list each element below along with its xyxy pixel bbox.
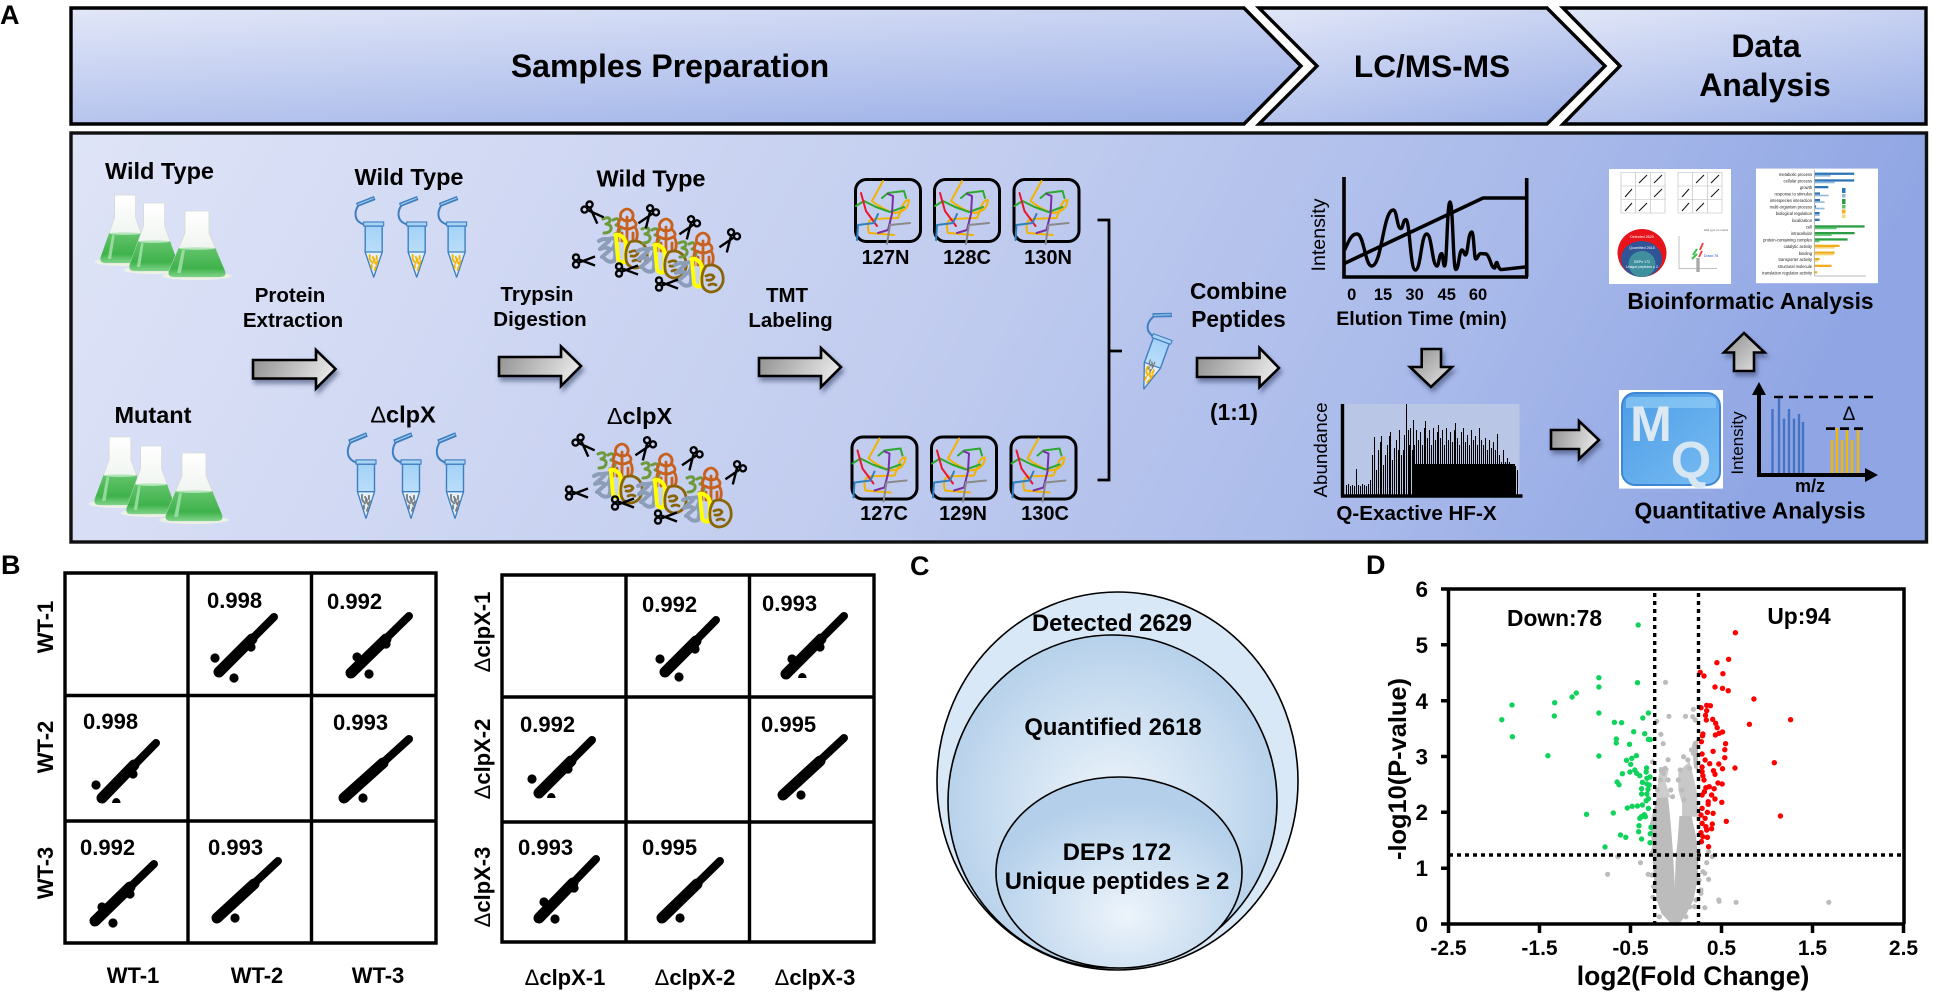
banner: Data Analysis step: Data xyxy=(1731,28,1801,64)
panel B: clpX correlation matrix: 0.992 xyxy=(520,712,575,737)
arrow: protein extraction xyxy=(253,350,336,389)
clpX row labels xyxy=(470,592,495,927)
panel B: wild type correlation matrix: 0.993 xyxy=(208,835,263,860)
chart: LC elution profile xyxy=(1308,177,1528,330)
label: Bioinformatic Analysis: Bioinformatic Analysis xyxy=(1627,288,1874,314)
icon: MaxQuant logo xyxy=(1619,390,1723,490)
panel label C: C xyxy=(910,551,930,581)
green downregulated proteins xyxy=(1502,625,1651,847)
clpX row labels: ΔclpX-1 xyxy=(470,592,495,672)
x axis tick labels: 2.5 xyxy=(1889,937,1918,960)
thumbnail: GO annotation bar chart: metabolic process xyxy=(1779,172,1812,177)
panel B: wild type correlation matrix: 0.992 xyxy=(80,835,135,860)
icon: MaxQuant logo: Q xyxy=(1671,432,1711,490)
chart: isobaric quantification spectrum: Δ xyxy=(1843,404,1856,425)
chart: LC elution profile: 0 xyxy=(1347,286,1356,304)
label: Protein Extraction: Protein xyxy=(255,284,325,307)
panel B: wild type correlation matrix: 0.998 xyxy=(207,588,262,613)
clpX column labels xyxy=(525,965,855,990)
arrow: down to spectrum xyxy=(1410,349,1452,387)
label: Wild Type tubes: Wild Type xyxy=(354,164,464,190)
label: Wild Type culture: Wild Type xyxy=(105,158,214,184)
wild type row labels: WT-2 xyxy=(33,721,58,773)
wild type column labels: WT-2 xyxy=(231,963,283,988)
label: clpX mutant tubes: ΔclpX xyxy=(370,402,436,428)
TMT tag tiles: top row: 128C xyxy=(943,247,991,269)
thumbnail: GO annotation bar chart: structural molecule xyxy=(1778,264,1813,269)
thumbnail: GO annotation bar chart: biological regulation xyxy=(1776,211,1813,216)
chart: isobaric quantification spectrum xyxy=(1728,382,1878,496)
thumbnail: result figures: Down:78 xyxy=(1704,254,1718,258)
panel C: nested protein counts diagram: Detected 2629 xyxy=(1032,610,1192,637)
label: Quantitative Analysis: Quantitative Analysis xyxy=(1634,498,1866,524)
x axis title: log2(Fold Change) xyxy=(1577,961,1809,991)
arrow: TMT labeling xyxy=(759,348,841,387)
y axis tick labels: 5 xyxy=(1415,633,1428,658)
arrow: spectrum to MaxQuant xyxy=(1551,421,1599,459)
panel C: nested protein counts diagram: Unique peptides ≥ 2 xyxy=(1005,868,1229,895)
arrow: up to bioinformatics xyxy=(1724,333,1765,371)
icon: wild type proteins and scissors xyxy=(573,200,741,292)
y axis title: -log10(P-value) xyxy=(1384,678,1412,860)
thumbnail: GO annotation bar chart: multi-organism process xyxy=(1770,205,1812,210)
thumbnail: result figures: Detected 2629 xyxy=(1630,235,1654,239)
clpX column labels: ΔclpX-1 xyxy=(525,965,605,990)
annotation: up count: Up:94 xyxy=(1767,603,1831,629)
label: TMT Labeling: TMT xyxy=(766,284,809,307)
thumbnail: GO annotation bar chart: response to stimulus xyxy=(1774,192,1812,197)
panel label D: D xyxy=(1366,550,1386,580)
annotation: down count: Down:78 xyxy=(1507,605,1602,631)
chart: LC elution profile: 30 xyxy=(1405,286,1424,304)
icon: combined tube xyxy=(1127,308,1180,392)
icon: mutant tubes xyxy=(348,434,465,518)
wild type column labels: WT-1 xyxy=(107,963,159,988)
panel C: nested protein counts diagram: Quantified 2618 xyxy=(1024,714,1202,741)
panel B: wild type correlation matrix xyxy=(65,573,436,943)
label: clpX digest: ΔclpX xyxy=(607,403,672,429)
icon: wild type tubes xyxy=(355,198,467,277)
banner: Data Analysis step: Analysis xyxy=(1699,67,1831,103)
panel label B: B xyxy=(1,550,20,580)
chart: LC elution profile: 15 xyxy=(1374,286,1392,304)
y axis tick labels: 0 xyxy=(1415,912,1428,937)
label: ratio 1:1: (1:1) xyxy=(1210,399,1258,425)
TMT tag tiles: bottom row: 127C xyxy=(860,503,908,525)
arrow: trypsin digestion xyxy=(499,346,581,386)
chart: LC elution profile: 60 xyxy=(1469,286,1487,304)
label: Combine Peptides: Combine xyxy=(1190,278,1287,304)
TMT tag tiles: top row: 127N xyxy=(862,247,909,269)
y axis tick labels: 6 xyxy=(1415,577,1428,602)
chart: LC elution profile: Elution Time (min) xyxy=(1336,308,1507,330)
clpX column labels: ΔclpX-2 xyxy=(655,965,735,990)
x axis tick labels: 1.5 xyxy=(1798,937,1827,960)
wild type row labels: WT-1 xyxy=(33,601,58,653)
wild type column labels: WT-3 xyxy=(352,963,404,988)
banner: Samples Preparation step: Samples Preparation xyxy=(511,48,829,84)
label: Protein Extraction xyxy=(243,284,343,332)
thumbnail: GO annotation bar chart: catalytic activity xyxy=(1784,244,1813,249)
banner: LC/MS-MS step xyxy=(1259,8,1605,124)
thumbnail: GO annotation bar chart: intracellular xyxy=(1791,231,1813,236)
panel B: wild type correlation matrix: 0.998 xyxy=(83,709,138,734)
chart: mass spectrum abundance: Q-Exactive HF-X xyxy=(1336,502,1497,525)
label: Combine Peptides: Peptides xyxy=(1191,306,1286,332)
chart: mass spectrum abundance xyxy=(1310,402,1522,525)
thumbnail: result figures: Unique peptides ≥ 2 xyxy=(1626,265,1658,269)
panel B: clpX correlation matrix xyxy=(502,575,874,942)
chart: LC elution profile: Intensity xyxy=(1308,198,1330,271)
arrow: combine peptides xyxy=(1197,348,1279,387)
wild type row labels xyxy=(33,601,58,899)
wild type row labels: WT-3 xyxy=(33,847,58,899)
clpX column labels: ΔclpX-3 xyxy=(775,965,855,990)
panel B: clpX correlation matrix: 0.993 xyxy=(518,835,573,860)
TMT tag tiles: top row: 130N xyxy=(1024,247,1072,269)
icon: wild type flasks xyxy=(95,195,232,280)
thumbnail: GO annotation bar chart: cell xyxy=(1806,225,1812,230)
label: Trypsin Digestion: Digestion xyxy=(493,308,587,331)
chart: LC elution profile: 45 xyxy=(1438,286,1456,304)
icon: mutant flasks xyxy=(88,437,229,524)
thumbnail: GO annotation bar chart: binding xyxy=(1799,251,1813,256)
x axis tick labels: 0.5 xyxy=(1707,937,1736,960)
y axis tick labels: 4 xyxy=(1415,689,1428,714)
TMT tag tiles: bottom row: 129N xyxy=(939,503,987,525)
icon: MaxQuant logo: M xyxy=(1630,396,1672,452)
panel A workflow xyxy=(71,133,1926,542)
thumbnail: GO annotation bar chart xyxy=(1756,169,1878,283)
y axis tick labels: 1 xyxy=(1415,856,1428,881)
thumbnail: result figures: Quantified 2618 xyxy=(1629,246,1655,250)
label: Trypsin Digestion xyxy=(493,283,587,331)
panel B: wild type correlation matrix: 0.992 xyxy=(327,589,382,614)
label: Trypsin Digestion: Trypsin xyxy=(501,283,573,306)
label: TMT Labeling: Labeling xyxy=(748,309,833,332)
red upregulated proteins xyxy=(1700,633,1791,847)
x axis tick labels: -1.5 xyxy=(1521,937,1558,960)
y axis tick labels: 2 xyxy=(1415,800,1428,825)
banner: LC/MS-MS step: LC/MS-MS xyxy=(1354,48,1510,84)
thumbnail: GO annotation bar chart: translation regulator activity xyxy=(1762,270,1813,276)
label: TMT Labeling xyxy=(748,284,833,332)
thumbnail: GO annotation bar chart: cellular process xyxy=(1784,179,1812,184)
x axis tick labels xyxy=(1430,937,1918,960)
TMT tag tiles: bottom row xyxy=(852,437,1076,525)
icon: mutant proteins and scissors xyxy=(566,433,747,527)
panel C: nested protein counts diagram xyxy=(937,592,1298,970)
thumbnail: GO annotation bar chart: transporter activity xyxy=(1779,257,1813,262)
clpX row labels: ΔclpX-3 xyxy=(470,847,495,927)
thumbnail: result figures: Wild type vs mutant xyxy=(1704,228,1728,232)
label: Combine Peptides xyxy=(1190,278,1287,332)
chart: isobaric quantification spectrum: Intensity xyxy=(1728,411,1747,475)
panel B: clpX correlation matrix: 0.995 xyxy=(642,835,697,860)
x axis tick labels: -2.5 xyxy=(1430,937,1467,960)
chart: isobaric quantification spectrum: m/z xyxy=(1795,476,1825,496)
panel B: clpX correlation matrix: 0.992 xyxy=(642,592,697,617)
wild type column labels xyxy=(107,963,404,988)
TMT tag tiles: bottom row: 130C xyxy=(1021,503,1069,525)
gray non-significant proteins xyxy=(1608,682,1829,926)
panel B: clpX correlation matrix: 0.995 xyxy=(761,712,816,737)
banner: Data Analysis step xyxy=(1563,8,1926,124)
thumbnail: result figures: DEPs 172 xyxy=(1634,260,1650,264)
thumbnail: GO annotation bar chart: interspecies interaction xyxy=(1770,198,1813,203)
y axis tick labels: 3 xyxy=(1415,744,1428,770)
thumbnail: GO annotation bar chart: localization xyxy=(1792,218,1813,223)
y axis tick labels xyxy=(1415,577,1428,937)
panel D: volcano plot xyxy=(1384,577,1918,991)
bracket combining channels xyxy=(1098,220,1122,480)
thumbnail: GO annotation bar chart: growth xyxy=(1800,185,1813,190)
clpX row labels: ΔclpX-2 xyxy=(470,719,495,799)
TMT tag tiles: top row xyxy=(856,180,1079,269)
panel label A: A xyxy=(0,0,20,30)
x axis tick labels: -0.5 xyxy=(1612,937,1649,960)
thumbnail: result figures xyxy=(1609,169,1731,284)
label: Protein Extraction: Extraction xyxy=(243,309,343,332)
plot frame and ticks xyxy=(1441,589,1904,933)
label: Wild Type digest: Wild Type xyxy=(596,166,706,192)
chart: mass spectrum abundance: Abundance xyxy=(1310,402,1331,498)
panel C: nested protein counts diagram: DEPs 172 xyxy=(1063,839,1171,866)
threshold lines xyxy=(1449,593,1902,924)
banner: Samples Preparation step xyxy=(71,8,1301,124)
label: Mutant culture: Mutant xyxy=(114,402,192,428)
thumbnail: GO annotation bar chart: protein-containing complex xyxy=(1763,238,1812,243)
panel B: wild type correlation matrix: 0.993 xyxy=(333,710,388,735)
panel B: clpX correlation matrix: 0.993 xyxy=(762,591,817,616)
